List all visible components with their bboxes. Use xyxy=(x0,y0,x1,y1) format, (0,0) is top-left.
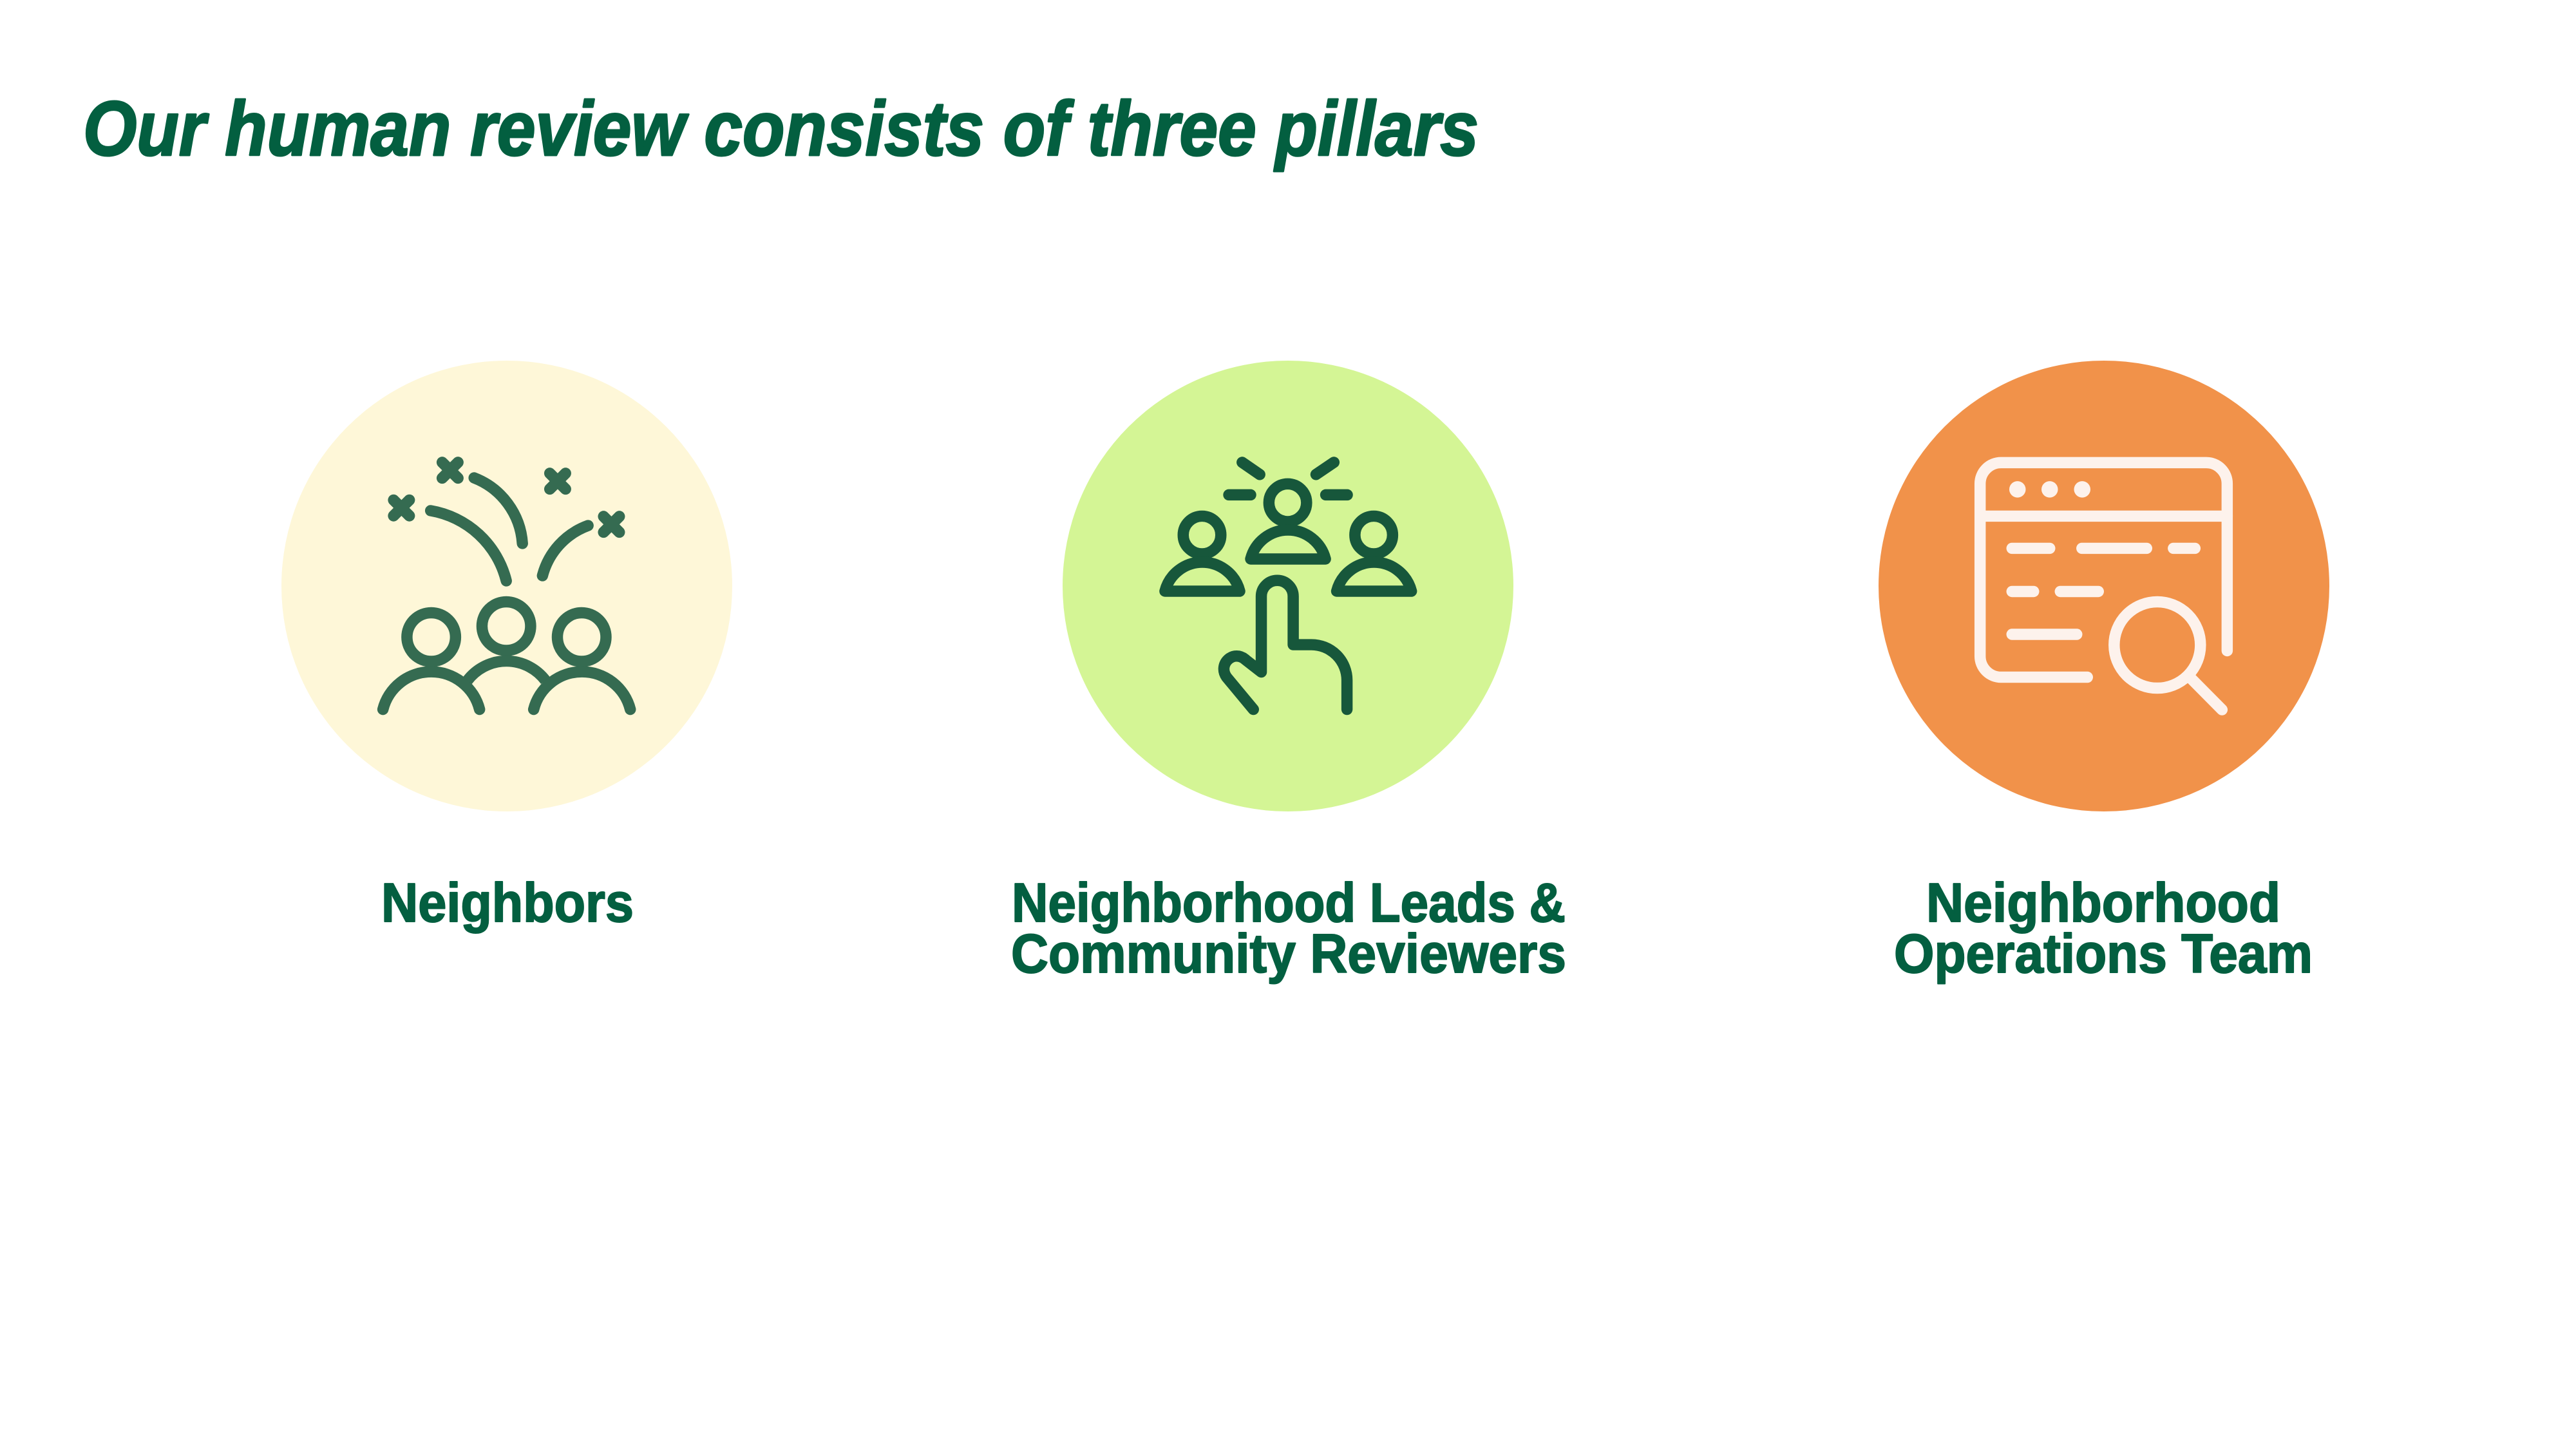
icon: crowd with fireworks xyxy=(383,462,630,710)
label: Neighborhood Operations Team: Neighborhood xyxy=(1926,873,2280,934)
panel: Neighborhood Operations Team xyxy=(1879,361,2329,985)
panel: Neighborhood Leads and Community Reviewers xyxy=(1011,361,1566,985)
label: Neighborhood Leads and Community Reviewers: Community Reviewers xyxy=(1011,923,1566,985)
icon: browser window with magnifier xyxy=(1980,462,2227,710)
title: Our human review consists of three pillars xyxy=(83,86,1479,172)
icon circle: cream xyxy=(281,361,732,811)
label: Neighborhood Leads and Community Reviewers: Neighborhood Leads & xyxy=(1012,873,1566,934)
label: Neighborhood Operations Team: Operations Team xyxy=(1894,923,2313,985)
icon circle: lime xyxy=(1063,361,1513,811)
icon circle: orange xyxy=(1879,361,2329,811)
label: Neighbors: Neighbors xyxy=(381,873,634,934)
icon: three people and pointing hand xyxy=(1165,462,1412,710)
panel: Neighbors xyxy=(281,361,732,934)
